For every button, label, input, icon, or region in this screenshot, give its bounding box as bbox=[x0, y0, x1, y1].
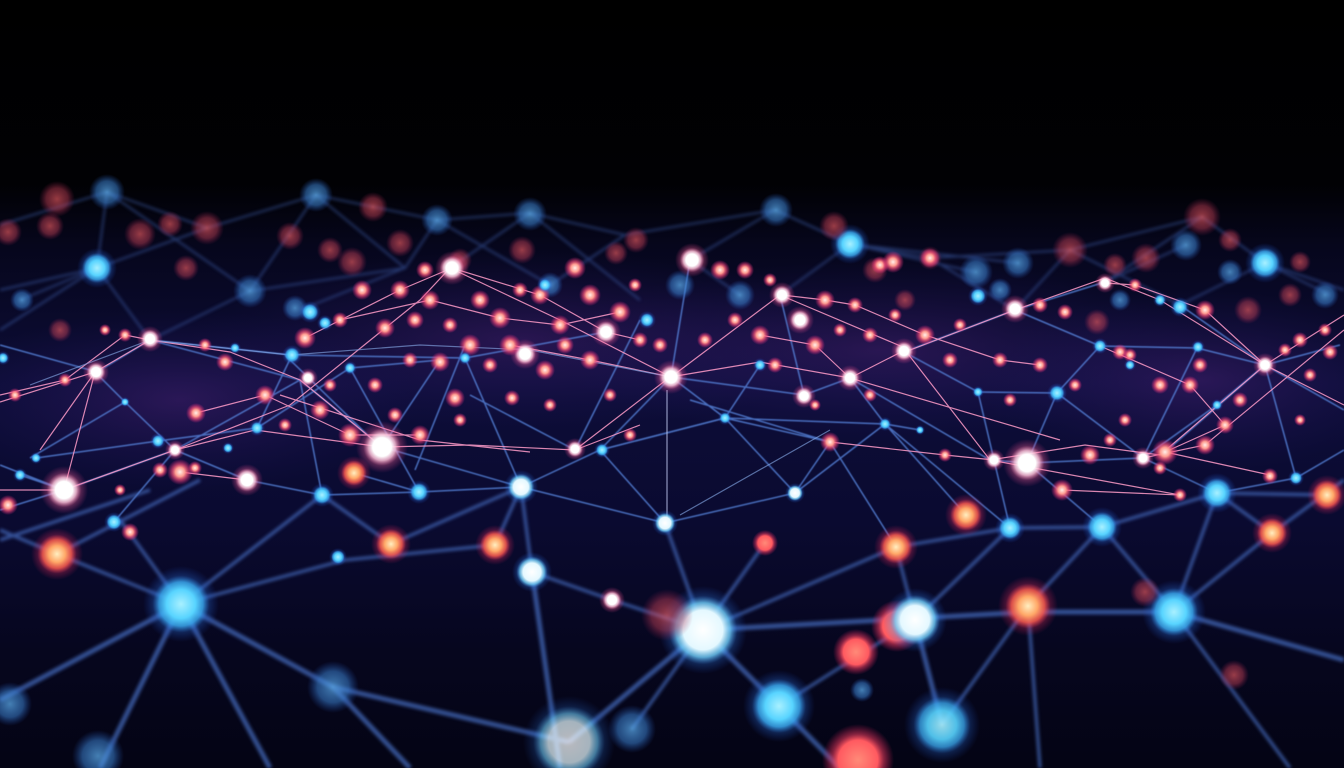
ridge small nodes bbox=[0, 243, 1338, 566]
distant dim bokeh nodes bbox=[0, 174, 1339, 342]
mid network lines bbox=[0, 260, 1344, 547]
foreground network lines bbox=[0, 480, 1344, 768]
far network lines bbox=[0, 192, 1344, 340]
foreground large nodes bbox=[0, 421, 1344, 768]
ridge haze glow bbox=[0, 250, 1344, 490]
pink ridge lines bbox=[0, 268, 1344, 520]
